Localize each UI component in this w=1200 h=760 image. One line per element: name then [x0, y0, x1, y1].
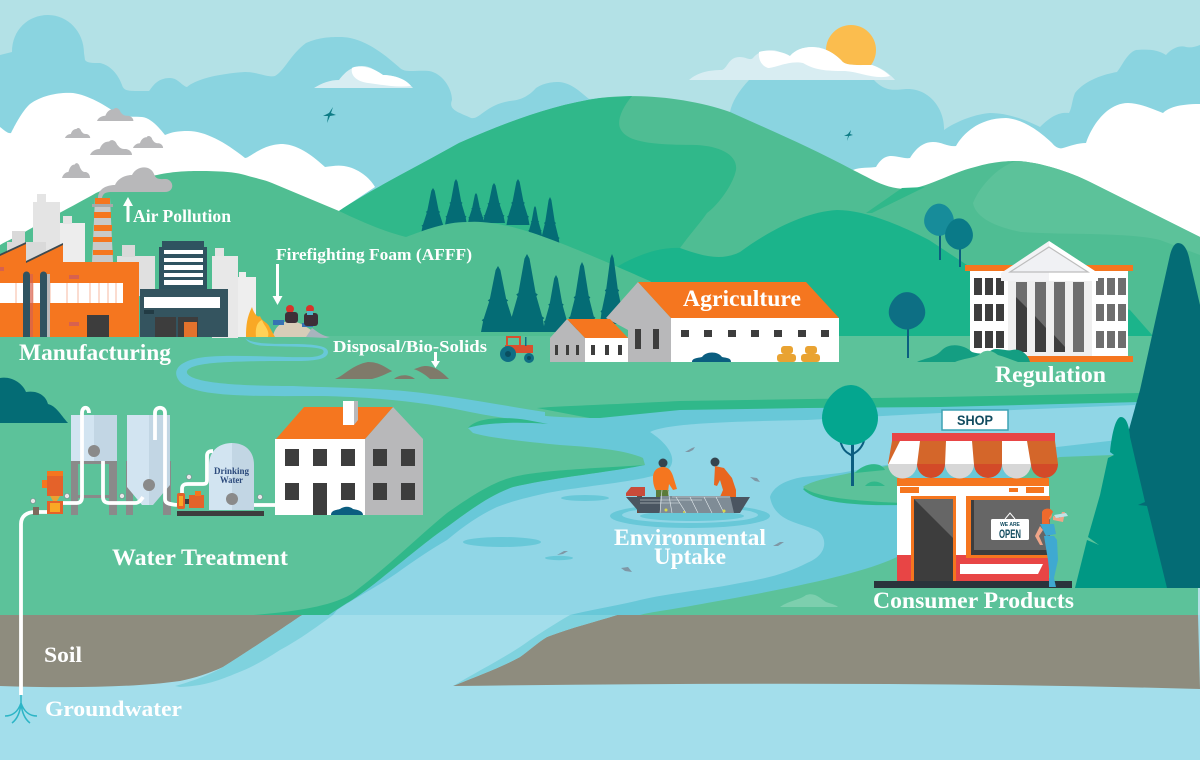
river inner light water: [333, 405, 1135, 615]
label: drinking water: Water: [220, 475, 243, 485]
lone tree: [889, 292, 925, 358]
sign: [942, 410, 1008, 430]
label: firefighting foam: Firefighting Foam (AFFF): [276, 245, 472, 264]
air pollution arrow: [123, 197, 133, 222]
factory door: [87, 315, 109, 337]
distant trees on regulation hill: [889, 204, 973, 358]
label: environmental uptake: Environmental: [614, 525, 766, 550]
cyan wedge left: [175, 615, 333, 687]
label: drinking water: Drinking: [214, 466, 249, 476]
label: environmental uptake: Uptake: [654, 544, 726, 569]
tractor: [500, 337, 534, 363]
valley streak: [866, 187, 925, 213]
motor: [626, 487, 645, 496]
tree cluster: [924, 204, 973, 267]
small outbuilding: [550, 319, 585, 362]
soil right: [453, 615, 1200, 689]
boat with fishers: [610, 458, 770, 528]
stream: [176, 338, 545, 424]
darker hill face: [339, 96, 736, 340]
shop: [874, 410, 1072, 588]
fish in net: [664, 508, 726, 513]
manufacturing: [0, 194, 256, 338]
grey smoke clouds: [62, 108, 172, 198]
riverside tree: [822, 385, 878, 486]
flames: [246, 307, 275, 337]
label: disposal: Disposal/Bio-Solids: [333, 337, 487, 356]
barn roof: [638, 282, 839, 318]
gauges: [30, 474, 262, 504]
label: manufacturing: Manufacturing: [19, 340, 172, 365]
right small cloud: [689, 47, 895, 80]
firefighter two: [304, 305, 318, 326]
open sign: OPEN: [999, 527, 1021, 541]
pump one: [33, 471, 63, 515]
building body: [970, 268, 1128, 356]
fisher two: [710, 458, 736, 497]
firefighters with foam: [246, 305, 330, 338]
building body: [897, 478, 1049, 581]
label: regulation: Regulation: [995, 362, 1106, 387]
ground: [0, 336, 1198, 616]
firefighting arrow: [272, 264, 282, 305]
tank two: [126, 415, 171, 515]
tank one: [71, 415, 117, 515]
label: air pollution: Air Pollution: [133, 206, 231, 226]
teal office block: [140, 241, 228, 337]
firefighter one: [285, 305, 298, 323]
fisher one: [653, 458, 677, 497]
portico: [1008, 280, 1092, 356]
left small cloud: [314, 66, 413, 88]
agriculture barn: [550, 282, 839, 362]
dark bush: [0, 378, 68, 423]
sun: [826, 25, 876, 75]
pump two: [177, 491, 204, 509]
bio-solid mounds: [335, 362, 449, 379]
disposal arrow: [431, 352, 440, 368]
main hill: [339, 96, 1200, 400]
sign: SHOP: [957, 412, 993, 428]
awning: [888, 433, 1058, 478]
groundwater: [0, 615, 1200, 760]
foam: [273, 321, 318, 337]
well intake roots: [5, 695, 37, 723]
white clouds: [0, 93, 1200, 300]
river outer water: [327, 402, 1140, 615]
side windows: [974, 278, 1004, 348]
shop window: [966, 496, 1050, 558]
water treatment: [21, 408, 276, 695]
drinking water tank: [177, 443, 264, 516]
factory windows: [0, 283, 123, 303]
right dark tree: [1100, 243, 1200, 588]
barn gable: [606, 282, 671, 362]
lower spruce trees: [481, 254, 624, 332]
small ground mound: [780, 594, 838, 607]
barn windows: [635, 329, 829, 349]
darker mid hill: [612, 210, 1153, 345]
hoses: [273, 320, 313, 327]
label: consumer products: Consumer Products: [873, 588, 1074, 613]
woman drinking water: [1035, 509, 1068, 587]
regulation bushes: [917, 345, 1030, 362]
soil left: [0, 615, 302, 687]
open sign: WE ARE: [1000, 522, 1021, 528]
barn body: [671, 318, 839, 362]
bush: [692, 352, 731, 362]
cyan wedge right: [453, 615, 617, 686]
label: soil: Soil: [44, 642, 82, 667]
label: groundwater: Groundwater: [45, 696, 182, 721]
regulation building: [965, 241, 1133, 362]
hull: [626, 497, 750, 513]
chimney: [92, 198, 113, 262]
factory body: [0, 243, 139, 337]
swimming fish: [557, 447, 784, 572]
net: [660, 496, 734, 513]
left bank edge: [240, 465, 645, 616]
house: [275, 401, 423, 515]
upper spruce trees: [421, 179, 560, 247]
pipes: [21, 408, 276, 695]
label: agriculture: Agriculture: [683, 286, 801, 311]
orange trim: [965, 265, 1133, 362]
small clouds: [314, 47, 895, 88]
birds: [323, 107, 853, 141]
right hill swoosh: [973, 161, 1200, 255]
pediment: [1001, 241, 1098, 281]
door: [911, 496, 956, 581]
upper bank edge: [537, 393, 1140, 430]
island near shop: [803, 463, 900, 505]
hay bales: [777, 346, 820, 362]
right teal tree: [1075, 417, 1167, 588]
background city buildings: [7, 194, 256, 338]
factory pipes: [23, 272, 47, 337]
open sign: [991, 513, 1029, 541]
backwater crescent: [468, 418, 548, 428]
ripples: [610, 504, 770, 528]
blue background clouds: [0, 15, 1200, 240]
left hill: [0, 171, 720, 400]
base: [874, 581, 1072, 588]
river: [327, 402, 1140, 615]
river dark patches: [463, 537, 541, 547]
label: water treatment: Water Treatment: [112, 545, 288, 570]
